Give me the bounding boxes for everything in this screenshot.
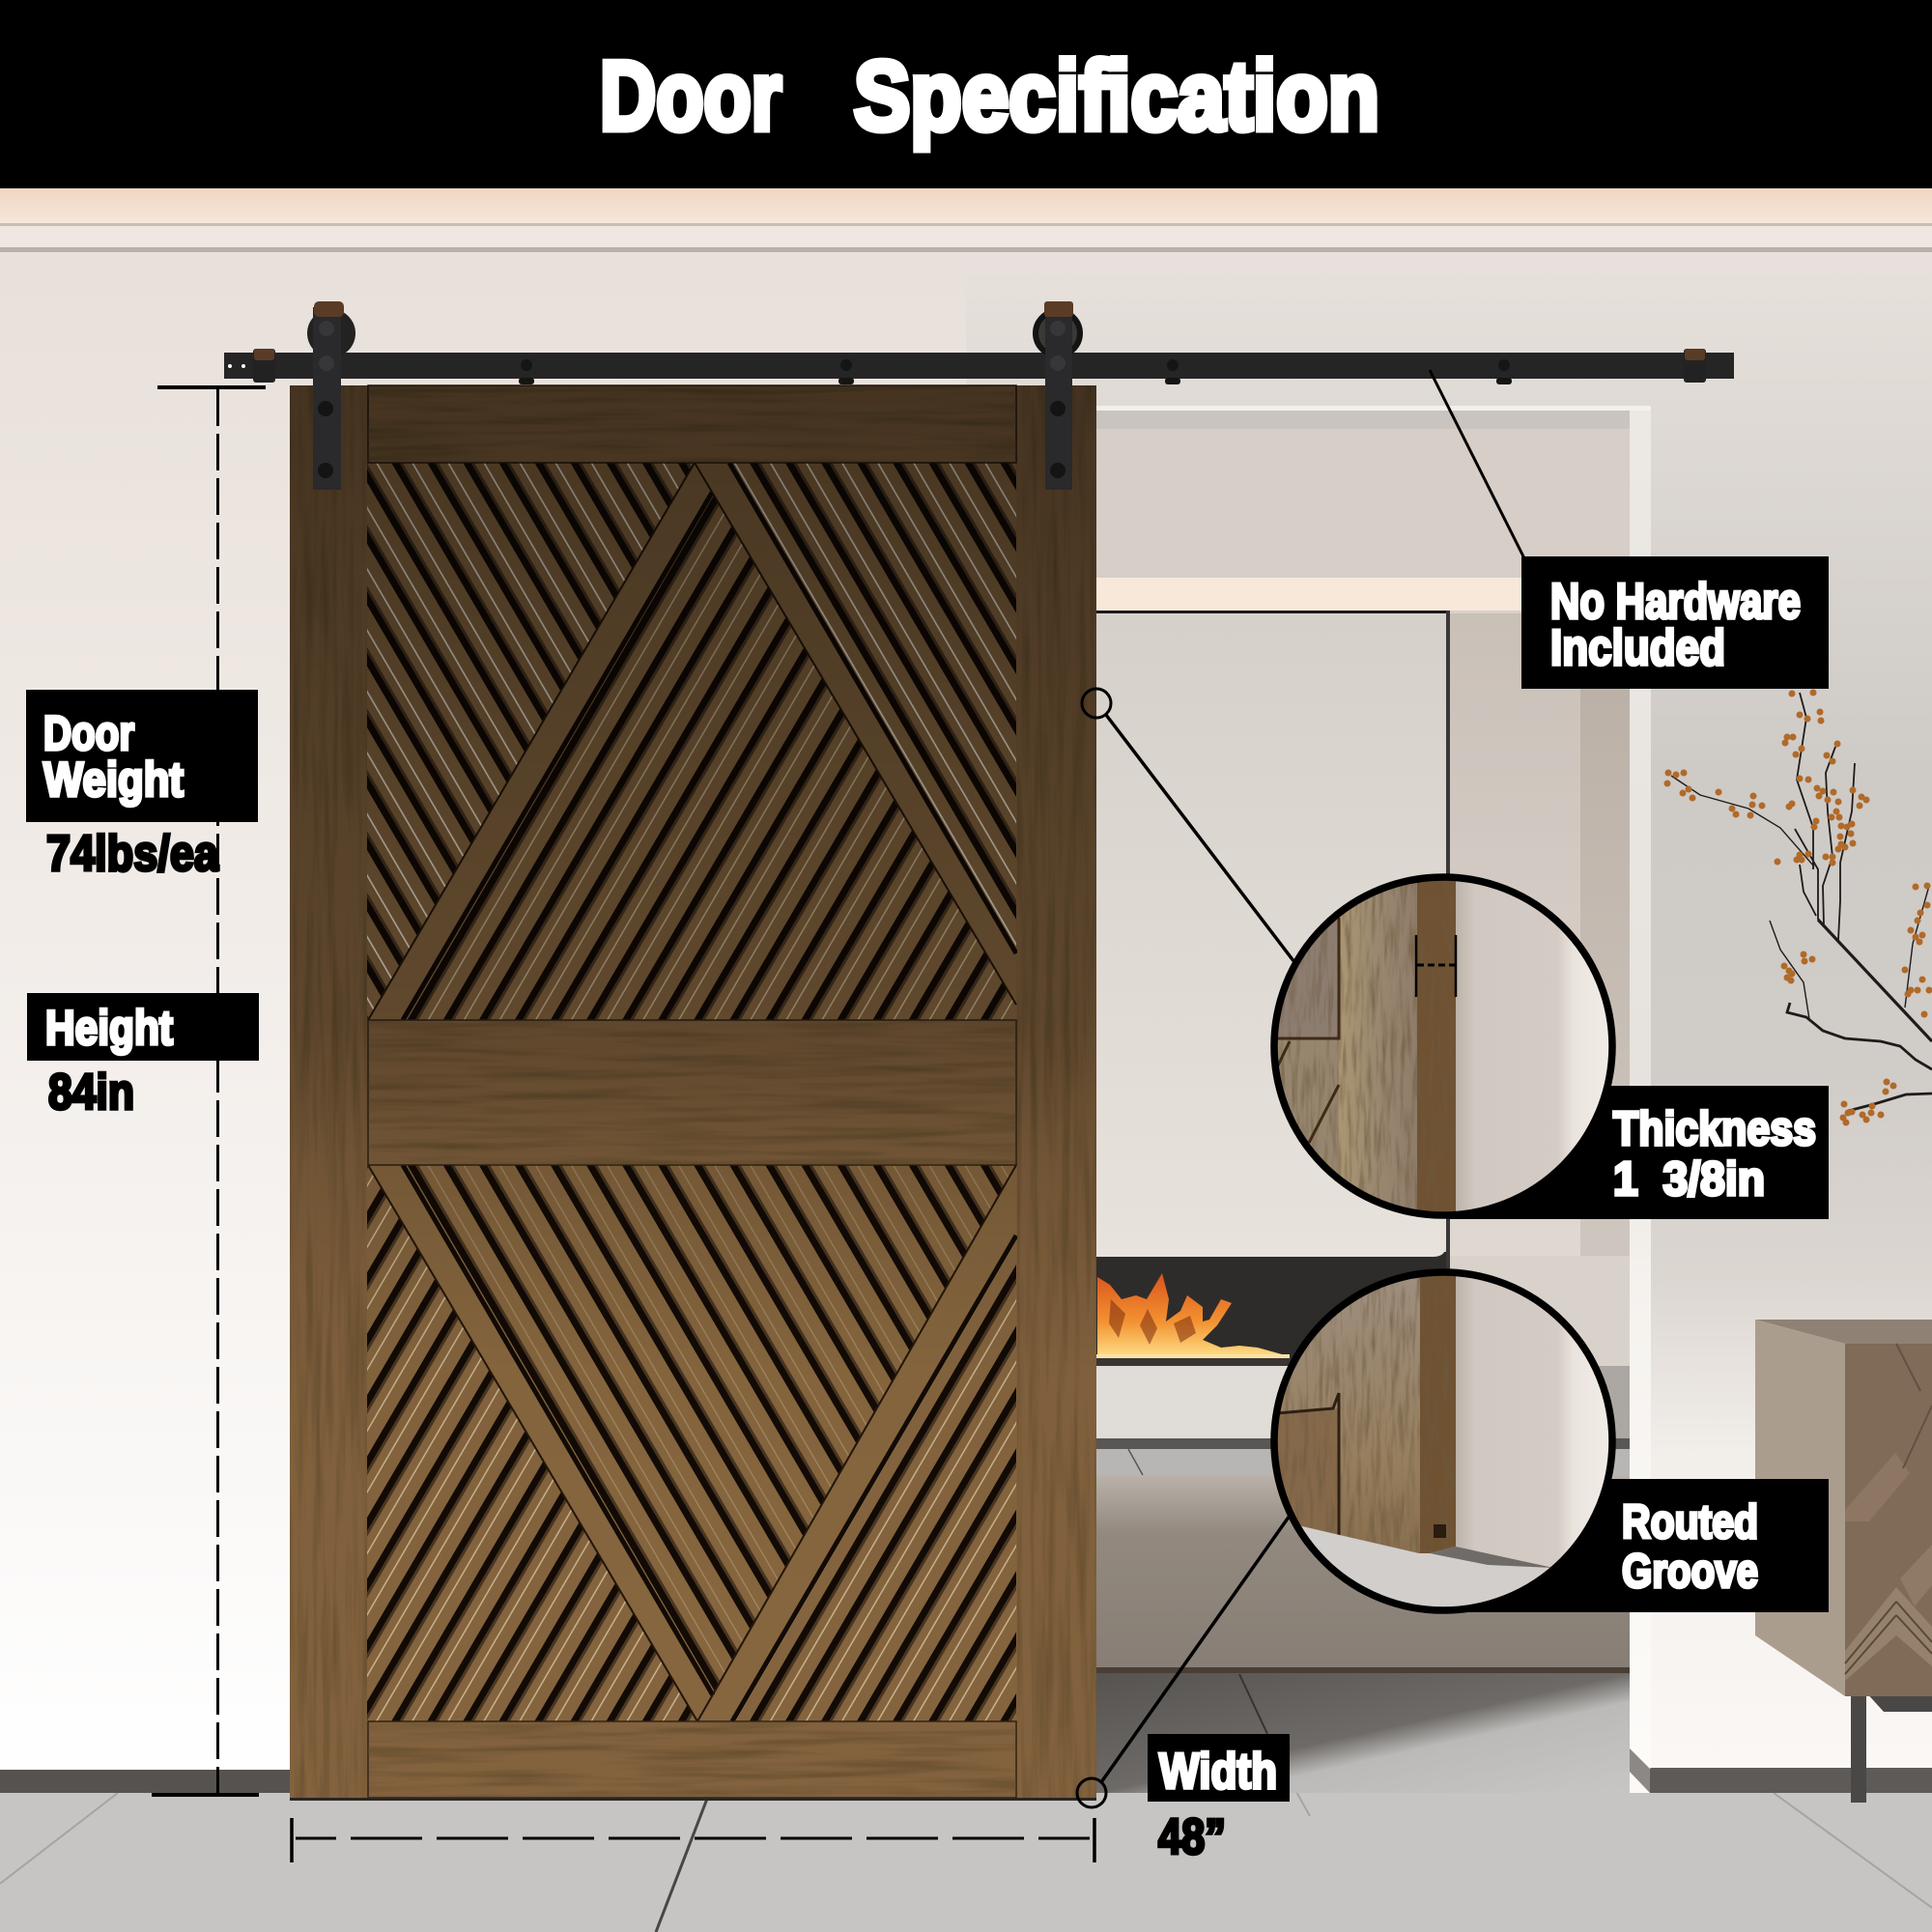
wood grain bottom rail	[368, 1721, 1016, 1798]
title: Door	[600, 43, 781, 151]
value: width: 48”	[1158, 1809, 1226, 1865]
panel seam lines	[368, 463, 1016, 1721]
width dimension	[292, 1818, 1094, 1862]
right wall	[966, 249, 1932, 1795]
detail circle: routed groove	[1265, 1265, 1633, 1623]
wood grain top rail	[368, 385, 1016, 463]
height dimension	[152, 387, 266, 1795]
label: thickness: Thickness	[1613, 1103, 1816, 1155]
cabinet	[1755, 1320, 1932, 1803]
wood grain right stile	[1017, 385, 1096, 1798]
upper panel: central triangle	[368, 463, 1016, 1020]
value: height: 84in	[48, 1065, 134, 1121]
marker: groove point	[1077, 1778, 1106, 1807]
label: door weight	[26, 690, 258, 822]
rail bolts	[519, 359, 1512, 384]
label: width: Width	[1159, 1744, 1277, 1800]
lower panel edge bands	[368, 1165, 1016, 1721]
label: no hardware included: Included	[1550, 620, 1725, 676]
upper panel edge bands	[368, 463, 1016, 1020]
top rail	[368, 385, 1016, 463]
lower panel: right triangle	[697, 1165, 1016, 1721]
cabinet legs	[1851, 1690, 1932, 1803]
upper panel: left triangle	[367, 463, 695, 1020]
title: Specification	[854, 43, 1379, 151]
detail circle: thickness	[1265, 869, 1620, 1222]
label: no hardware included	[1521, 556, 1829, 689]
fireplace	[1096, 1252, 1450, 1367]
plant branches with berries	[1663, 690, 1932, 1126]
back wall panel	[1096, 613, 1446, 1257]
lower panel: left triangle	[367, 1165, 697, 1721]
value: door weight: 74lbs/ea	[46, 826, 219, 882]
label: thickness	[1449, 1086, 1829, 1219]
upper panel: right triangle	[695, 463, 1016, 1005]
lower panel: central triangle	[368, 1165, 1016, 1719]
leader line: hardware	[1430, 370, 1524, 558]
ceiling cove lighting	[0, 188, 1932, 252]
title	[600, 43, 1379, 151]
label: height	[27, 993, 259, 1061]
marker: thickness point	[1082, 689, 1111, 718]
right hanger	[1036, 301, 1080, 490]
label: routed groove	[1449, 1479, 1829, 1612]
left wall	[0, 249, 966, 1776]
label: routed groove: Groove	[1622, 1546, 1758, 1598]
middle rail	[368, 1020, 1016, 1165]
label: no hardware included: No Hardware	[1550, 574, 1801, 630]
leader line: thickness	[1106, 715, 1294, 962]
baseboard	[0, 1768, 1932, 1793]
left hanger	[307, 301, 355, 490]
doorway opening and back room	[1096, 410, 1630, 1793]
barn door	[290, 385, 1096, 1801]
label: door weight: Door	[43, 706, 134, 760]
leader line: routed groove	[1101, 1516, 1290, 1782]
label: door weight: Weight	[43, 753, 184, 807]
label: height: Height	[45, 1001, 173, 1055]
door frame: stiles and rails	[290, 385, 1096, 1798]
bottom rail	[368, 1721, 1016, 1798]
rail end stops	[253, 349, 1706, 383]
right stile	[1017, 385, 1096, 1798]
label: thickness: 1 3/8in	[1613, 1153, 1765, 1206]
floor	[0, 1783, 1932, 1932]
left stile	[290, 385, 367, 1798]
wood grain on stiles	[290, 385, 367, 1798]
header band	[0, 0, 1932, 188]
door shading	[290, 385, 1096, 1798]
doorway jamb	[1096, 406, 1651, 1793]
sliding track rail	[224, 349, 1734, 384]
wood grain middle rail	[368, 1020, 1016, 1165]
label: routed groove: Routed	[1622, 1496, 1758, 1548]
